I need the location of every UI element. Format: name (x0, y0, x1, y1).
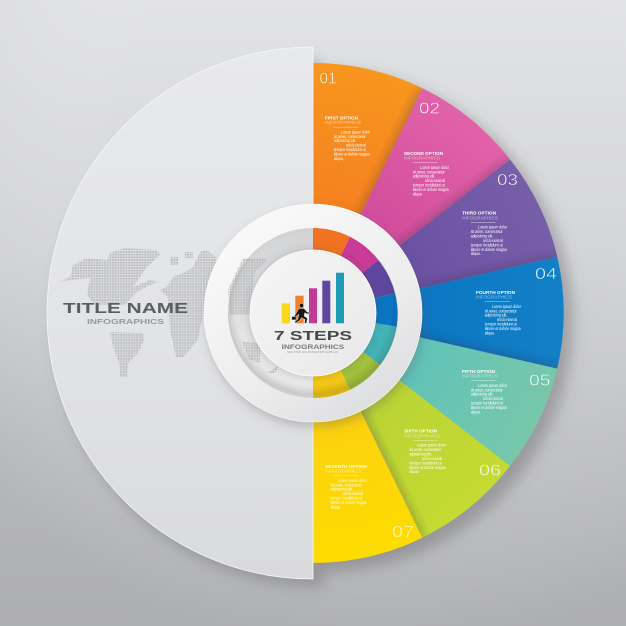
center caption: VECTOR ILLUSTRATION EPS 10 (287, 350, 339, 354)
text block: second option: labore et dolore magna (413, 187, 449, 192)
band purple (313, 260, 395, 313)
text block: first option: tempor incididunt ut (334, 147, 366, 152)
text block: second option (404, 151, 449, 196)
text block: second option: tempor incididunt ut (413, 183, 445, 188)
text block: seventh option: aliqua. (330, 504, 340, 510)
subtitle: INFOGRAPHICS (87, 317, 164, 326)
text block: third option: labore et dolore magna (471, 247, 507, 252)
text block: fourth option (476, 290, 521, 336)
text block: first option: FIRST OPTION (325, 116, 358, 120)
text block: sixth option: sed do eiusmod (422, 456, 442, 461)
inner disc shadow (248, 249, 378, 379)
text block: second option: SECOND OPTION (404, 151, 443, 156)
text block: first option (325, 116, 370, 161)
text block: first option: sit amet, consectetur (334, 134, 366, 139)
center heading: 7 STEPS: 7 STEPS (274, 329, 352, 343)
outer ring shadow (206, 209, 424, 427)
band orange (313, 228, 350, 313)
band inner shadow (228, 252, 398, 398)
band lime (313, 313, 380, 390)
text block: seventh option: labore et dolore magna (330, 500, 367, 505)
number 04: 04 (535, 266, 557, 283)
text block: seventh option: sit amet, consectetur (330, 482, 363, 487)
text block: sixth option: Lorem ipsum dolor (417, 443, 446, 448)
wedge 6 lime (313, 313, 510, 538)
text block: third option: THIRD OPTION (462, 211, 496, 216)
text block: fifth option: sit amet, consectetur (471, 387, 503, 392)
title: TITLE NAME (63, 300, 188, 317)
text block: fifth option: labore et dolore magna (471, 405, 507, 410)
text block: second option: sit amet, consectetur (413, 169, 445, 174)
text block: fifth option: FIFTH OPTION (462, 369, 495, 374)
number 02: 02 (419, 100, 440, 118)
text block: fourth option: INFOGRAPHICS (476, 295, 512, 300)
wedge 7 yellow (313, 313, 422, 563)
text block: second option: sed do eiusmod (425, 178, 445, 183)
wedge 4 blue (313, 257, 564, 369)
wedge 5 teal (313, 313, 557, 466)
band teal (313, 313, 397, 365)
band left half grey (228, 228, 313, 398)
number 01: 01 (320, 70, 336, 88)
band blue (313, 293, 398, 327)
bar chart icon (282, 273, 344, 323)
text block: fifth option: Lorem ipsum dolor (478, 383, 507, 388)
text block: sixth option: labore et dolore magna (410, 465, 446, 470)
band yellow (313, 313, 350, 398)
band map dots (228, 258, 279, 373)
text block: seventh option (325, 464, 367, 510)
drop shadow of the wheel (55, 60, 573, 586)
text block: sixth option (404, 429, 446, 474)
text block: seventh option: INFOGRAPHICS (325, 469, 361, 474)
panel: left semicircle (47, 47, 313, 579)
text block: third option: tempor incididunt ut (471, 242, 503, 247)
text block: second option: adipisicing elit, (413, 174, 435, 179)
text block: third option: sit amet, consectetur (471, 229, 503, 234)
text block: sixth option: aliqua. (410, 469, 420, 474)
world map dots (60, 248, 217, 377)
text block: fourth option: Lorem ipsum dolor (492, 304, 521, 309)
text block: fourth option: sed do eiusmod (497, 317, 517, 322)
text block: fourth option: adipisicing elit, (485, 313, 507, 318)
text block: sixth option: INFOGRAPHICS (404, 433, 440, 438)
text block: seventh option: SEVENTH OPTION (325, 464, 367, 469)
inner disc (250, 250, 376, 376)
text block: sixth option: sit amet, consectetur (410, 447, 442, 452)
text block: third option: sed do eiusmod (483, 238, 503, 243)
number 07: 07 (392, 524, 414, 541)
text block: sixth option: SIXTH OPTION (404, 429, 437, 434)
text block: seventh option: adipisicing elit, (330, 487, 353, 492)
text block: fifth option: INFOGRAPHICS (462, 374, 498, 379)
text block: fourth option: sit amet, consectetur (485, 308, 517, 313)
text block: fifth option: adipisicing elit, (471, 392, 493, 397)
ring: inner band (225, 219, 401, 398)
band pink (313, 237, 378, 313)
text block: first option: aliqua. (334, 156, 344, 161)
text block: sixth option: tempor incididunt ut (410, 460, 442, 465)
panel: coloured wedges (313, 63, 564, 563)
number 05: 05 (529, 372, 550, 390)
text block: fourth option: labore et dolore magna (485, 326, 521, 331)
number 03: 03 (497, 172, 518, 189)
text block: third option: aliqua. (471, 251, 481, 256)
text block: third option: adipisicing elit, (471, 233, 493, 238)
wedge 3 purple (313, 160, 557, 313)
text block: third option (462, 211, 507, 256)
text block: first option: INFOGRAPHICS (325, 120, 361, 125)
text block: first option: adipisicing elit, (334, 138, 356, 143)
text block: fifth option: aliqua. (471, 410, 481, 414)
text block: first option: Lorem ipsum dolor (341, 129, 370, 134)
center subheading: INFOGRAPHICS (282, 345, 344, 351)
number 06: 06 (479, 462, 501, 480)
text block: first option: sed do eiusmod (346, 143, 366, 148)
text block: seventh option: Lorem ipsum dolor (338, 478, 367, 483)
wedge 1 orange (313, 63, 422, 313)
wedge edge shadows (354, 86, 558, 538)
ring: white outer (204, 204, 422, 422)
text block: second option: INFOGRAPHICS (404, 156, 440, 161)
icon: running businessman (292, 303, 310, 324)
text block: fourth option: aliqua. (485, 330, 495, 336)
text block: fifth option: sed do eiusmod (483, 396, 503, 401)
text block: sixth option: adipisicing elit, (410, 451, 432, 456)
text block: second option: aliqua. (413, 192, 423, 196)
text block: fifth option: tempor incididunt ut (471, 401, 503, 406)
text block: fifth option (462, 369, 507, 414)
text block: second option: Lorem ipsum dolor (420, 165, 449, 170)
wedge 2 pink (313, 88, 510, 313)
text block: seventh option: tempor incididunt ut (330, 496, 363, 501)
text block: seventh option: sed do eiusmod (343, 491, 363, 496)
text block: third option: INFOGRAPHICS (462, 215, 498, 220)
text block: third option: Lorem ipsum dolor (478, 224, 507, 229)
text block: fourth option: FOURTH OPTION (476, 290, 515, 295)
text block: first option: labore et dolore magna (334, 152, 370, 157)
text block: fourth option: tempor incididunt ut (485, 322, 517, 327)
